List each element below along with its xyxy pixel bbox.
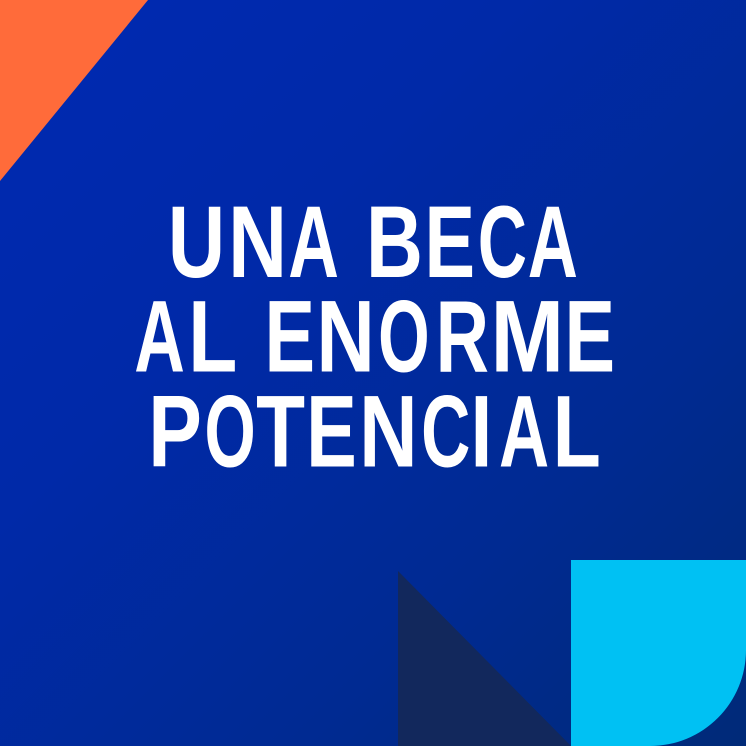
title line 2: L	[188, 281, 237, 394]
title line 3: N	[359, 375, 418, 489]
shape: navy triangle	[398, 571, 571, 746]
title line 1: A	[288, 185, 339, 299]
title line 2	[134, 279, 615, 394]
shape: orange corner triangle	[0, 0, 148, 181]
title	[134, 184, 615, 489]
title line 1: E	[424, 186, 475, 300]
shape: cyan rounded square	[571, 560, 746, 746]
title line 3: E	[306, 376, 357, 489]
title line 3	[148, 375, 601, 489]
title line 2: R	[436, 279, 489, 393]
title line 3: T	[256, 375, 305, 489]
title line 2: M	[490, 281, 564, 394]
title line 2: A	[134, 280, 185, 394]
title line 3: I	[470, 376, 492, 489]
title line 3: O	[204, 375, 256, 489]
title line 3: L	[553, 375, 601, 489]
title line 3: A	[499, 376, 549, 489]
title line 2: E	[264, 281, 315, 394]
title line 2: O	[378, 280, 430, 394]
title line 3: P	[148, 376, 202, 489]
title line 2: N	[316, 280, 375, 394]
title line 1: B	[366, 185, 423, 299]
title line 1: C	[478, 185, 527, 299]
title line 1: A	[528, 186, 578, 299]
title line 1: N	[228, 184, 287, 299]
title line 1	[168, 184, 578, 300]
title line 2: E	[564, 281, 615, 394]
title line 3: C	[421, 375, 470, 489]
title line 1: U	[168, 185, 225, 299]
